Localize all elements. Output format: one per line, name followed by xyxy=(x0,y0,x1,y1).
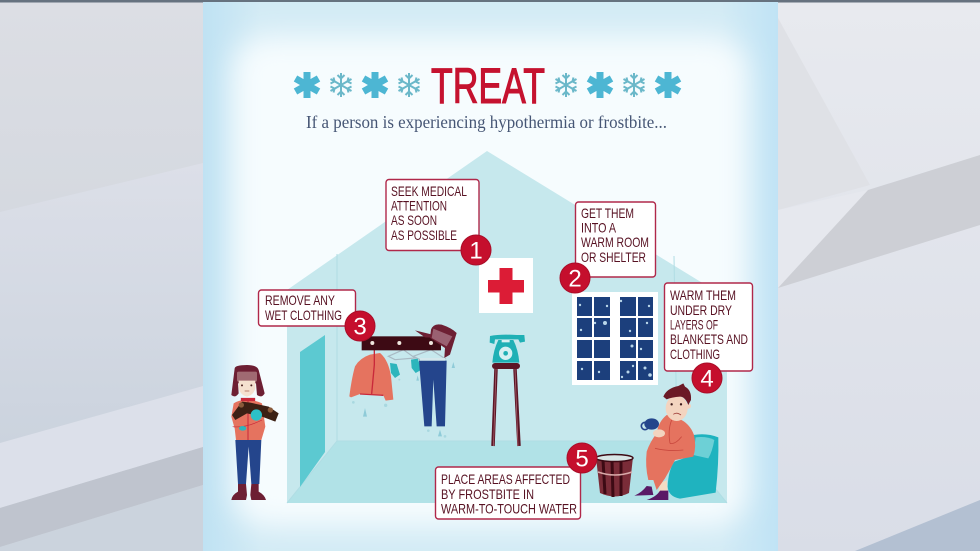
callout 1: seek medical attention: ATTENTION xyxy=(391,198,447,214)
wet mittens xyxy=(390,359,422,378)
callout 4: blankets and clothing: 4 xyxy=(700,366,714,392)
callout 3: remove wet clothing: REMOVE ANY xyxy=(265,292,335,308)
armchair xyxy=(668,434,718,499)
callout 4: blankets and clothing: BLANKETS AND xyxy=(670,331,748,347)
ushanka hat xyxy=(231,365,265,396)
person in armchair holding mug xyxy=(634,383,718,500)
mug and hands xyxy=(641,422,649,430)
callout 5: warm-to-touch water: PLACE AREAS AFFECTED xyxy=(441,471,570,487)
icon: red cross sign xyxy=(479,258,533,313)
callout 5: warm-to-touch water: WARM-TO-TOUCH WATER xyxy=(441,500,577,516)
callout 5: warm-to-touch water: BY FROSTBITE IN xyxy=(441,486,534,502)
callout 3: remove wet clothing xyxy=(258,290,375,341)
callout 4: blankets and clothing: CLOTHING xyxy=(670,346,720,362)
bucket of warm water xyxy=(596,454,633,497)
head xyxy=(666,396,688,421)
callout 2: warm room or shelter xyxy=(560,202,656,293)
callout 1: seek medical attention: AS SOON xyxy=(391,212,437,228)
callout 1: seek medical attention xyxy=(386,180,491,265)
callout 5: warm-to-touch water xyxy=(436,443,597,519)
callout 2: warm room or shelter: WARM ROOM xyxy=(581,234,649,250)
callout 5: warm-to-touch water: 5 xyxy=(575,446,589,472)
title: TREAT xyxy=(431,58,545,114)
wet jacket xyxy=(349,353,393,401)
callout 2: warm room or shelter: 2 xyxy=(568,266,582,292)
callout 4: blankets and clothing: WARM THEM xyxy=(670,287,736,303)
heading row: snowflakes xyxy=(296,72,680,98)
trousers xyxy=(235,440,261,484)
boots xyxy=(231,484,266,500)
callout 4: blankets and clothing: LAYERS OF xyxy=(670,316,718,332)
subtitle: If a person is experiencing hypothermia or frostbite... xyxy=(306,112,667,132)
face xyxy=(239,381,255,397)
coat xyxy=(231,399,265,440)
window with snowy night xyxy=(572,292,658,385)
water drops xyxy=(363,362,455,436)
wet trousers xyxy=(419,361,447,426)
callout 2: warm room or shelter: OR SHELTER xyxy=(581,249,646,265)
telephone on stool xyxy=(490,335,525,446)
callout 2: warm room or shelter: GET THEM xyxy=(581,205,634,221)
callout 1: seek medical attention: AS POSSIBLE xyxy=(391,227,457,243)
legs and slippers xyxy=(658,480,668,492)
coat rack with wet clothing xyxy=(349,324,457,438)
wooden rack xyxy=(362,336,441,350)
panel: infographic sheet xyxy=(203,2,778,551)
logs xyxy=(232,402,279,422)
callout 3: remove wet clothing: 3 xyxy=(353,314,367,340)
person outside carrying logs xyxy=(231,365,279,500)
callout 4: blankets and clothing: UNDER DRY xyxy=(670,302,732,318)
robe xyxy=(646,415,695,490)
background: left grey broadcast panel xyxy=(0,0,203,551)
callout 2: warm room or shelter: INTO A xyxy=(581,220,616,236)
wet hat xyxy=(415,330,442,338)
callout 3: remove wet clothing: WET CLOTHING xyxy=(265,307,342,323)
house illustration xyxy=(287,151,727,503)
callout 4: blankets and clothing xyxy=(664,283,752,393)
callout 1: seek medical attention: 1 xyxy=(469,238,483,264)
mittens xyxy=(251,409,262,421)
callout 1: seek medical attention: SEEK MEDICAL xyxy=(391,183,467,199)
